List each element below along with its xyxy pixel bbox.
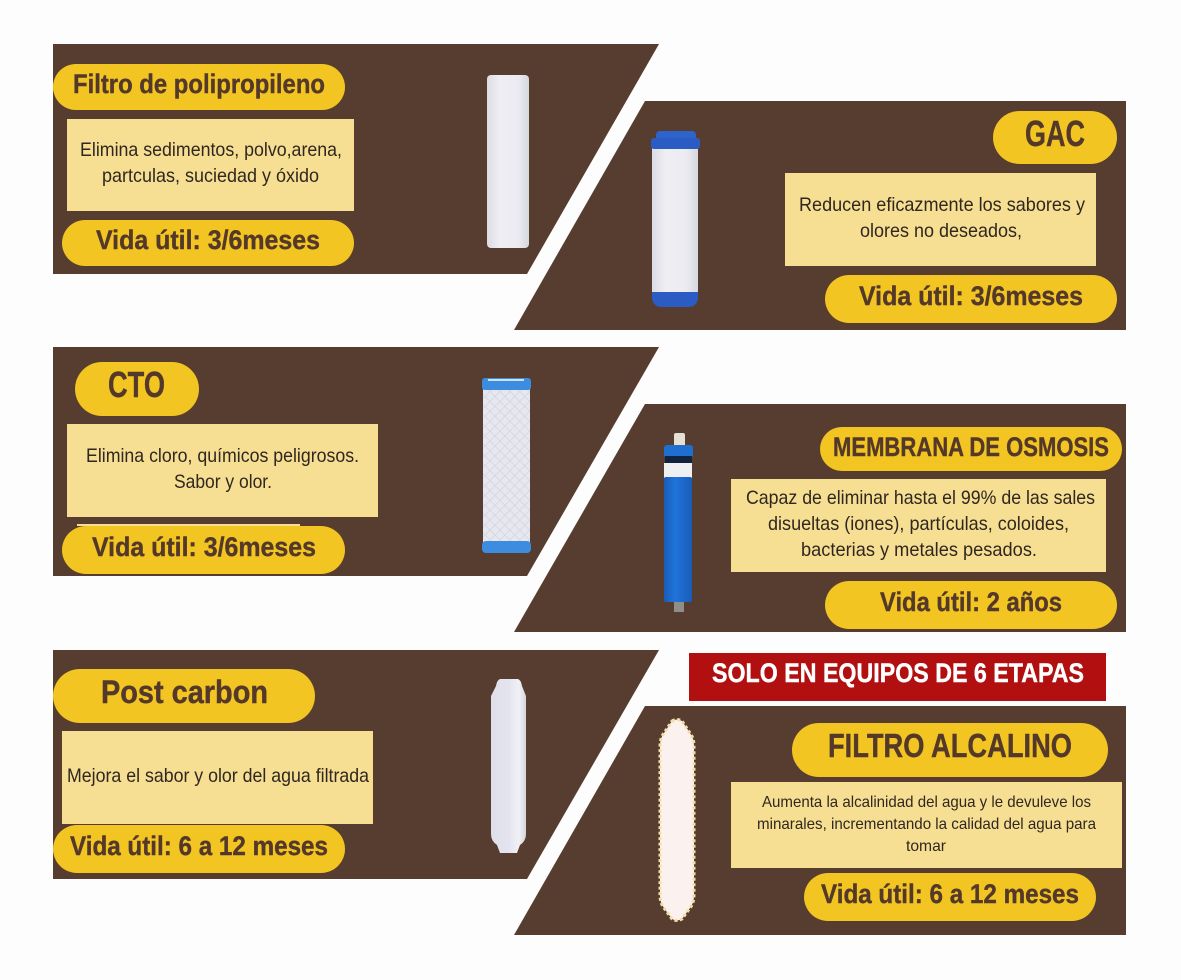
description: bacterias y metales pesados.: [801, 539, 1037, 561]
description: [731, 479, 1106, 572]
icon: post carbon filter: [491, 679, 526, 853]
service life: [62, 526, 345, 574]
icon: GAC filter: [651, 131, 700, 307]
heading: [53, 64, 345, 110]
heading: [792, 723, 1108, 777]
panel: Membrana de osmosis: [514, 404, 1126, 632]
description: olores no deseados,: [860, 220, 1022, 242]
notice: solo en equipos de 6 etapas: SOLO EN EQUIPOS DE 6 ETAPAS: [712, 658, 1084, 688]
panel: Post carbon: [53, 650, 659, 879]
icon: alkaline filter: [660, 720, 694, 920]
icon: osmosis membrane: [664, 433, 693, 612]
service life: Vida útil: 6 a 12 meses: [70, 831, 328, 861]
heading: [993, 111, 1117, 164]
service life: [53, 825, 345, 873]
icon: CTO filter: [482, 378, 531, 553]
panel shape: [53, 44, 659, 274]
description: Sabor y olor.: [174, 471, 272, 493]
notice: solo en equipos de 6 etapas: [689, 653, 1106, 701]
heading: MEMBRANA DE OSMOSIS: [833, 432, 1109, 462]
service life: [825, 581, 1117, 629]
description: Capaz de eliminar hasta el 99% de las sales: [746, 487, 1095, 509]
description: Reducen eficazmente los sabores y: [799, 194, 1085, 216]
description: tomar: [906, 838, 947, 855]
panel: CTO: [53, 347, 659, 576]
service life: [825, 275, 1117, 323]
panel shape: [53, 347, 659, 576]
panel shape: [53, 650, 659, 879]
description: disueltas (iones), partículas, coloides,: [768, 513, 1069, 535]
service life: Vida útil: 3/6meses: [92, 532, 316, 562]
panel: Filtro de polipropileno: [53, 44, 659, 274]
description: [62, 731, 373, 824]
description: minarales, incrementando la calidad del agua para: [757, 816, 1096, 833]
heading: GAC: [1025, 113, 1085, 154]
service life: [804, 873, 1096, 921]
heading: [820, 427, 1122, 471]
description: [731, 782, 1122, 868]
description: Aumenta la alcalinidad del agua y le devuleve los: [762, 794, 1091, 811]
heading: [75, 362, 199, 416]
description: Elimina sedimentos, polvo,arena,: [80, 139, 342, 161]
service life: Vida útil: 6 a 12 meses: [821, 879, 1079, 909]
description: [67, 424, 378, 526]
service life: [62, 220, 354, 266]
description: Elimina cloro, químicos peligrosos.: [86, 445, 359, 467]
panel shape: [514, 706, 1126, 935]
panel shape: [514, 101, 1126, 330]
panel: GAC: [514, 101, 1126, 330]
heading: CTO: [108, 364, 165, 405]
service life: Vida útil: 3/6meses: [859, 281, 1083, 311]
heading: Filtro de polipropileno: [73, 69, 325, 99]
description: [67, 119, 354, 211]
service life: Vida útil: 3/6meses: [96, 225, 320, 255]
description: [785, 173, 1096, 266]
description: partculas, suciedad y óxido: [102, 165, 319, 187]
heading: Post carbon: [101, 674, 268, 710]
heading: [53, 669, 315, 723]
panel: Filtro alcalino: [514, 706, 1126, 935]
description: Mejora el sabor y olor del agua filtrada: [67, 765, 369, 787]
panel shape: [514, 404, 1126, 632]
service life: Vida útil: 2 años: [880, 587, 1062, 617]
heading: FILTRO ALCALINO: [828, 727, 1072, 764]
icon: white sediment filter: [487, 75, 529, 248]
